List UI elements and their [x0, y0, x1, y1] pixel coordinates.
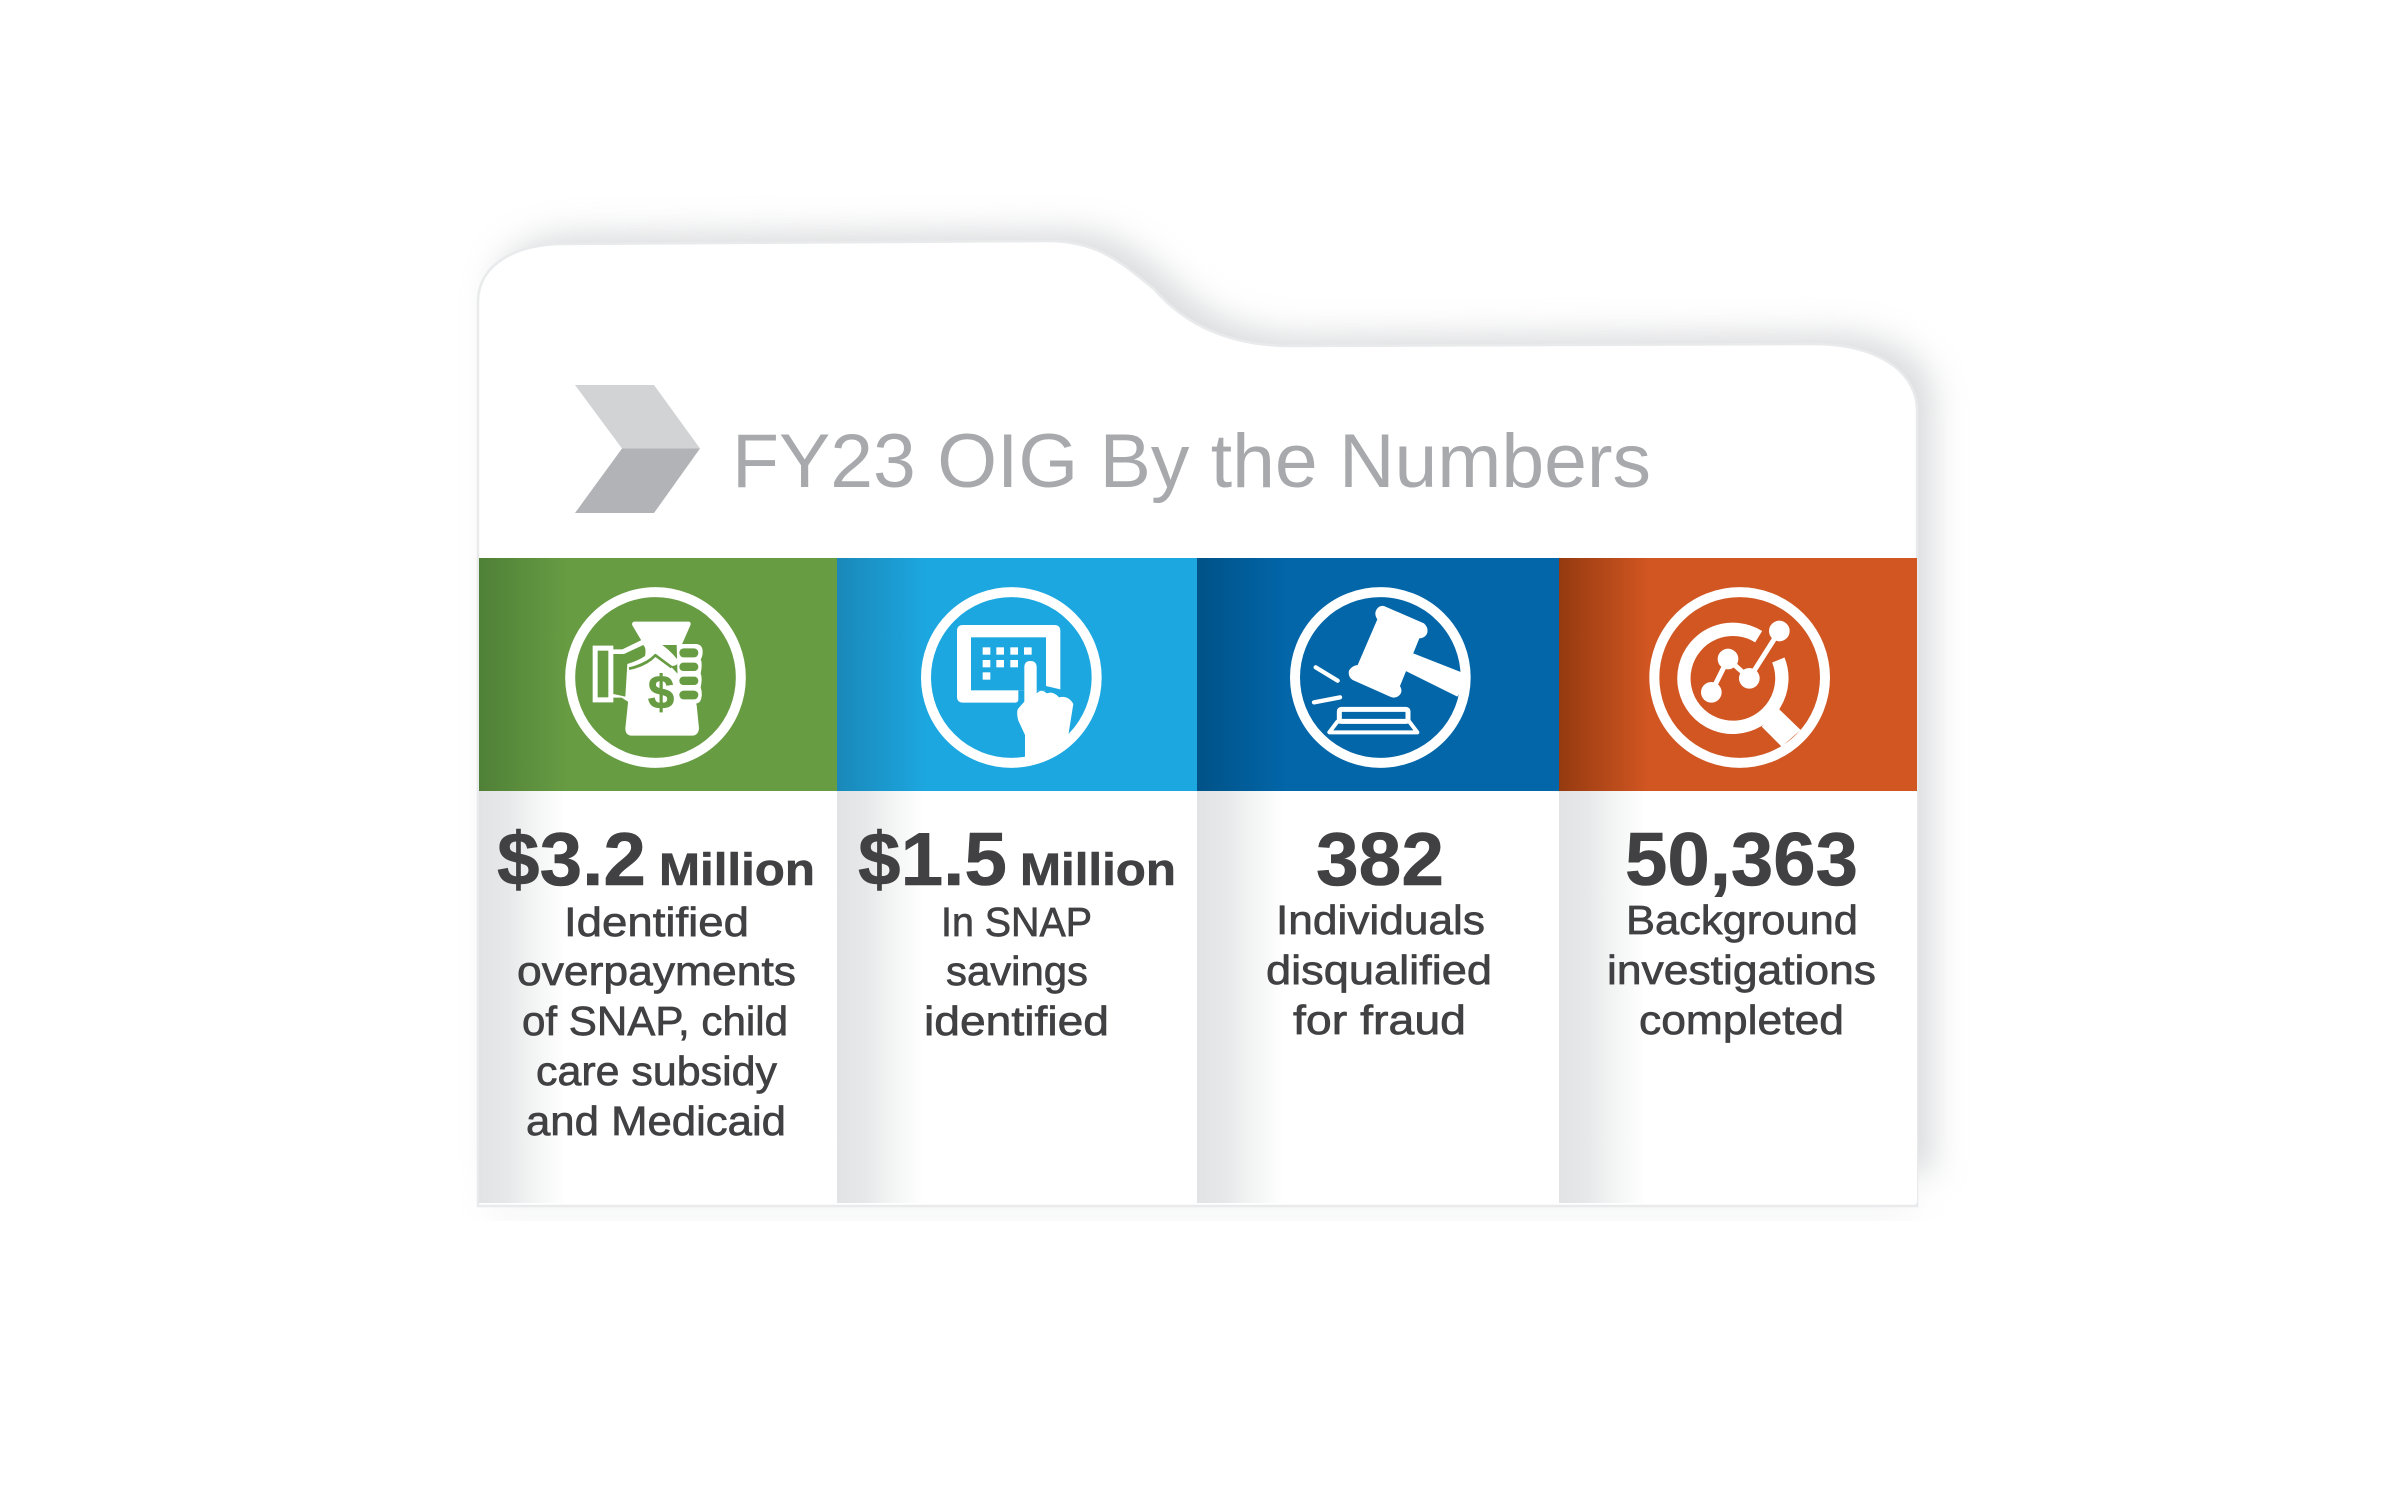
description: identified [924, 998, 1109, 1044]
color band [479, 558, 837, 791]
description: for fraud [1293, 997, 1466, 1043]
stat [497, 817, 815, 901]
description: In SNAP [941, 899, 1092, 945]
description: of SNAP, child [522, 998, 788, 1044]
body background [837, 791, 1197, 1203]
column 2: SNAP savings [837, 558, 1197, 1203]
description: investigations [1607, 947, 1876, 993]
description: Background [1626, 897, 1858, 943]
folder shadow [495, 230, 1934, 1174]
description: care subsidy [536, 1048, 778, 1094]
title: FY23 OIG By the Numbers [732, 419, 1651, 504]
stat: $3.2 [497, 817, 646, 901]
description: and Medicaid [526, 1098, 786, 1144]
stat: Million [1020, 844, 1176, 895]
stat: $1.5 [858, 817, 1007, 901]
panel: folder card [478, 230, 1934, 1218]
icon: hand holding money bag: $ [648, 666, 674, 719]
stat: 382 [1316, 817, 1444, 901]
description [924, 899, 1109, 1044]
folder shape [478, 241, 1917, 1206]
description: Individuals [1276, 897, 1485, 943]
color band [1559, 558, 1917, 791]
color band [837, 558, 1197, 791]
icon: finger tapping tablet [926, 592, 1097, 763]
column 3: fraud disqualifications [1197, 558, 1559, 1203]
column 1: overpayments [479, 558, 837, 1203]
description [1607, 897, 1876, 1043]
icon: hand holding money bag [570, 592, 741, 763]
icon: gavel [1295, 592, 1467, 763]
folder bottom shadow [490, 1190, 1915, 1218]
body background [479, 791, 837, 1203]
icon: chevron [575, 385, 700, 513]
stat [858, 817, 1176, 901]
description: overpayments [517, 948, 796, 994]
description: disqualified [1266, 947, 1492, 993]
description: savings [946, 948, 1088, 994]
description [1266, 897, 1492, 1043]
header: chevron and title [575, 385, 1651, 513]
body background [1559, 791, 1917, 1203]
column 4: background investigations [1559, 558, 1917, 1203]
description: Identified [564, 899, 749, 945]
icon: magnifier over line chart [1654, 592, 1825, 763]
description: completed [1639, 997, 1844, 1043]
stat: 50,363 [1625, 817, 1858, 901]
stat: Million [659, 844, 815, 895]
description [517, 899, 796, 1144]
body background [1197, 791, 1559, 1203]
color band [1197, 558, 1559, 791]
